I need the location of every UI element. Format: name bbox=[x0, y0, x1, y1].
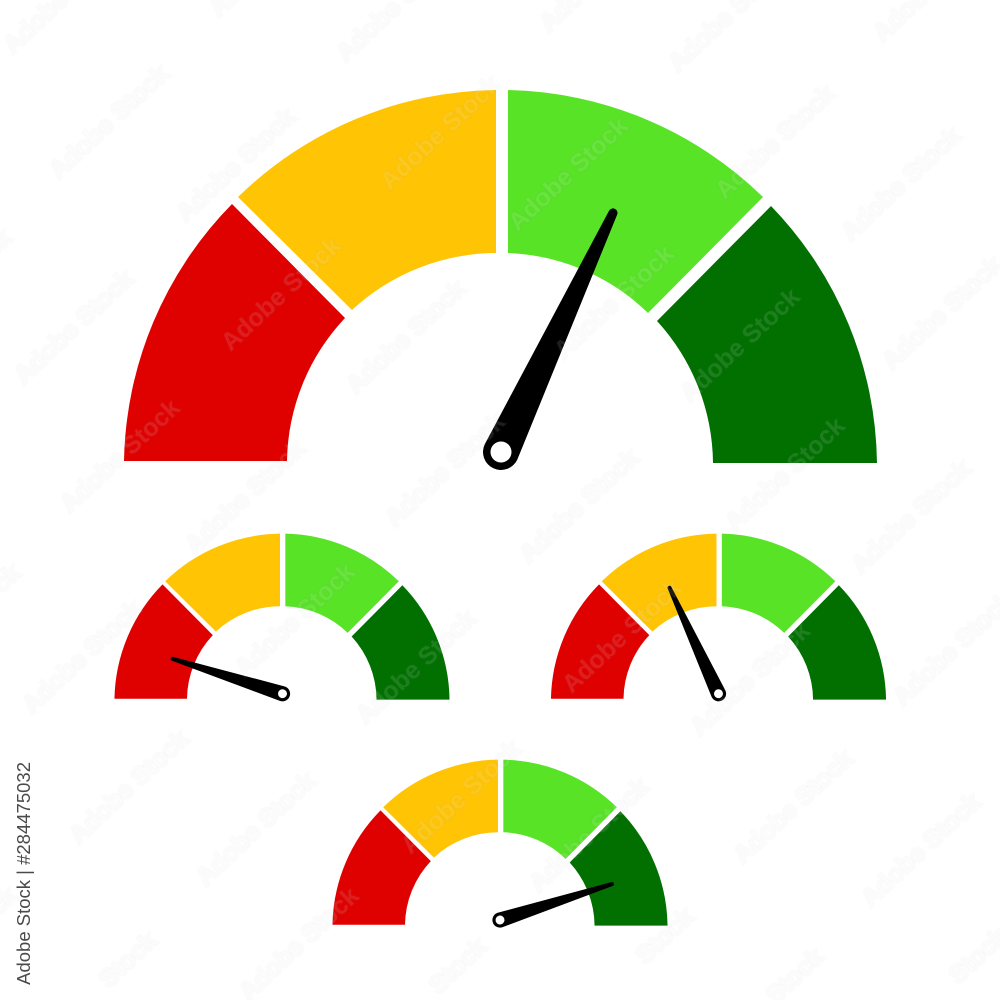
watermark pattern: Adobe Stock bbox=[380, 408, 510, 532]
gauge segments: small bottom bbox=[332, 760, 668, 926]
watermark pattern: Adobe Stock bbox=[64, 725, 194, 849]
watermark pattern: Adobe Stock bbox=[557, 574, 687, 698]
watermark pattern: Stock bbox=[424, 932, 493, 999]
watermark pattern: Adobe Stock bbox=[728, 745, 858, 869]
watermark pattern: Adobe Stock bbox=[341, 275, 471, 399]
watermark pattern: Adobe Stock bbox=[549, 240, 679, 364]
side credit text: Adobe Stock | #284475032 bbox=[13, 762, 34, 985]
needle: large bbox=[477, 201, 631, 476]
watermark pattern: Adobe Stock bbox=[351, 605, 481, 729]
watermark pattern: Adobe Stock bbox=[375, 71, 505, 195]
needle: small right bbox=[662, 583, 729, 704]
needle: small bottom bbox=[490, 876, 616, 930]
watermark pattern: Stock bbox=[631, 902, 700, 969]
watermark pattern: Adobe Stock bbox=[55, 394, 185, 518]
gauge: small bottom bbox=[332, 760, 668, 930]
watermark pattern: Adobe Stock bbox=[216, 232, 346, 356]
gauge segments: large bbox=[124, 90, 877, 463]
gauge segments: small left bbox=[114, 534, 450, 700]
watermark pattern: Adobe Stock bbox=[44, 60, 174, 184]
needle: small left bbox=[168, 651, 292, 703]
watermark pattern: Adobe Stock bbox=[9, 265, 139, 389]
watermark pattern: Adobe Stock bbox=[685, 617, 815, 741]
watermark pattern: Adobe Stock bbox=[396, 735, 526, 859]
gauge: small left bbox=[114, 534, 450, 703]
gauge: large bbox=[124, 90, 877, 476]
watermark pattern: Adobe Stock bbox=[710, 80, 840, 204]
watermark pattern: Adobe Stock bbox=[846, 455, 976, 579]
gauge: small right bbox=[551, 534, 886, 704]
watermark pattern: Adobe Stock bbox=[230, 558, 360, 682]
watermark pattern: Adobe Stock bbox=[180, 435, 310, 559]
watermark pattern: Adobe Stock bbox=[836, 122, 966, 246]
watermark pattern: Adobe Stock bbox=[524, 773, 654, 897]
watermark pattern: Adobe Stock bbox=[514, 444, 644, 568]
gauge segments: small right bbox=[551, 534, 886, 700]
watermark pattern: Stock bbox=[94, 926, 163, 993]
watermark pattern: Adobe Stock bbox=[856, 788, 986, 912]
watermark pattern: Adobe Stock bbox=[191, 767, 321, 891]
watermark pattern: Adobe Stock bbox=[503, 112, 633, 236]
watermark pattern: Adobe Stock bbox=[171, 103, 301, 227]
watermark pattern: Adobe Stock bbox=[17, 595, 147, 719]
watermark pattern: Adobe Stock bbox=[675, 283, 805, 407]
watermark pattern: Adobe Stock bbox=[720, 412, 850, 536]
